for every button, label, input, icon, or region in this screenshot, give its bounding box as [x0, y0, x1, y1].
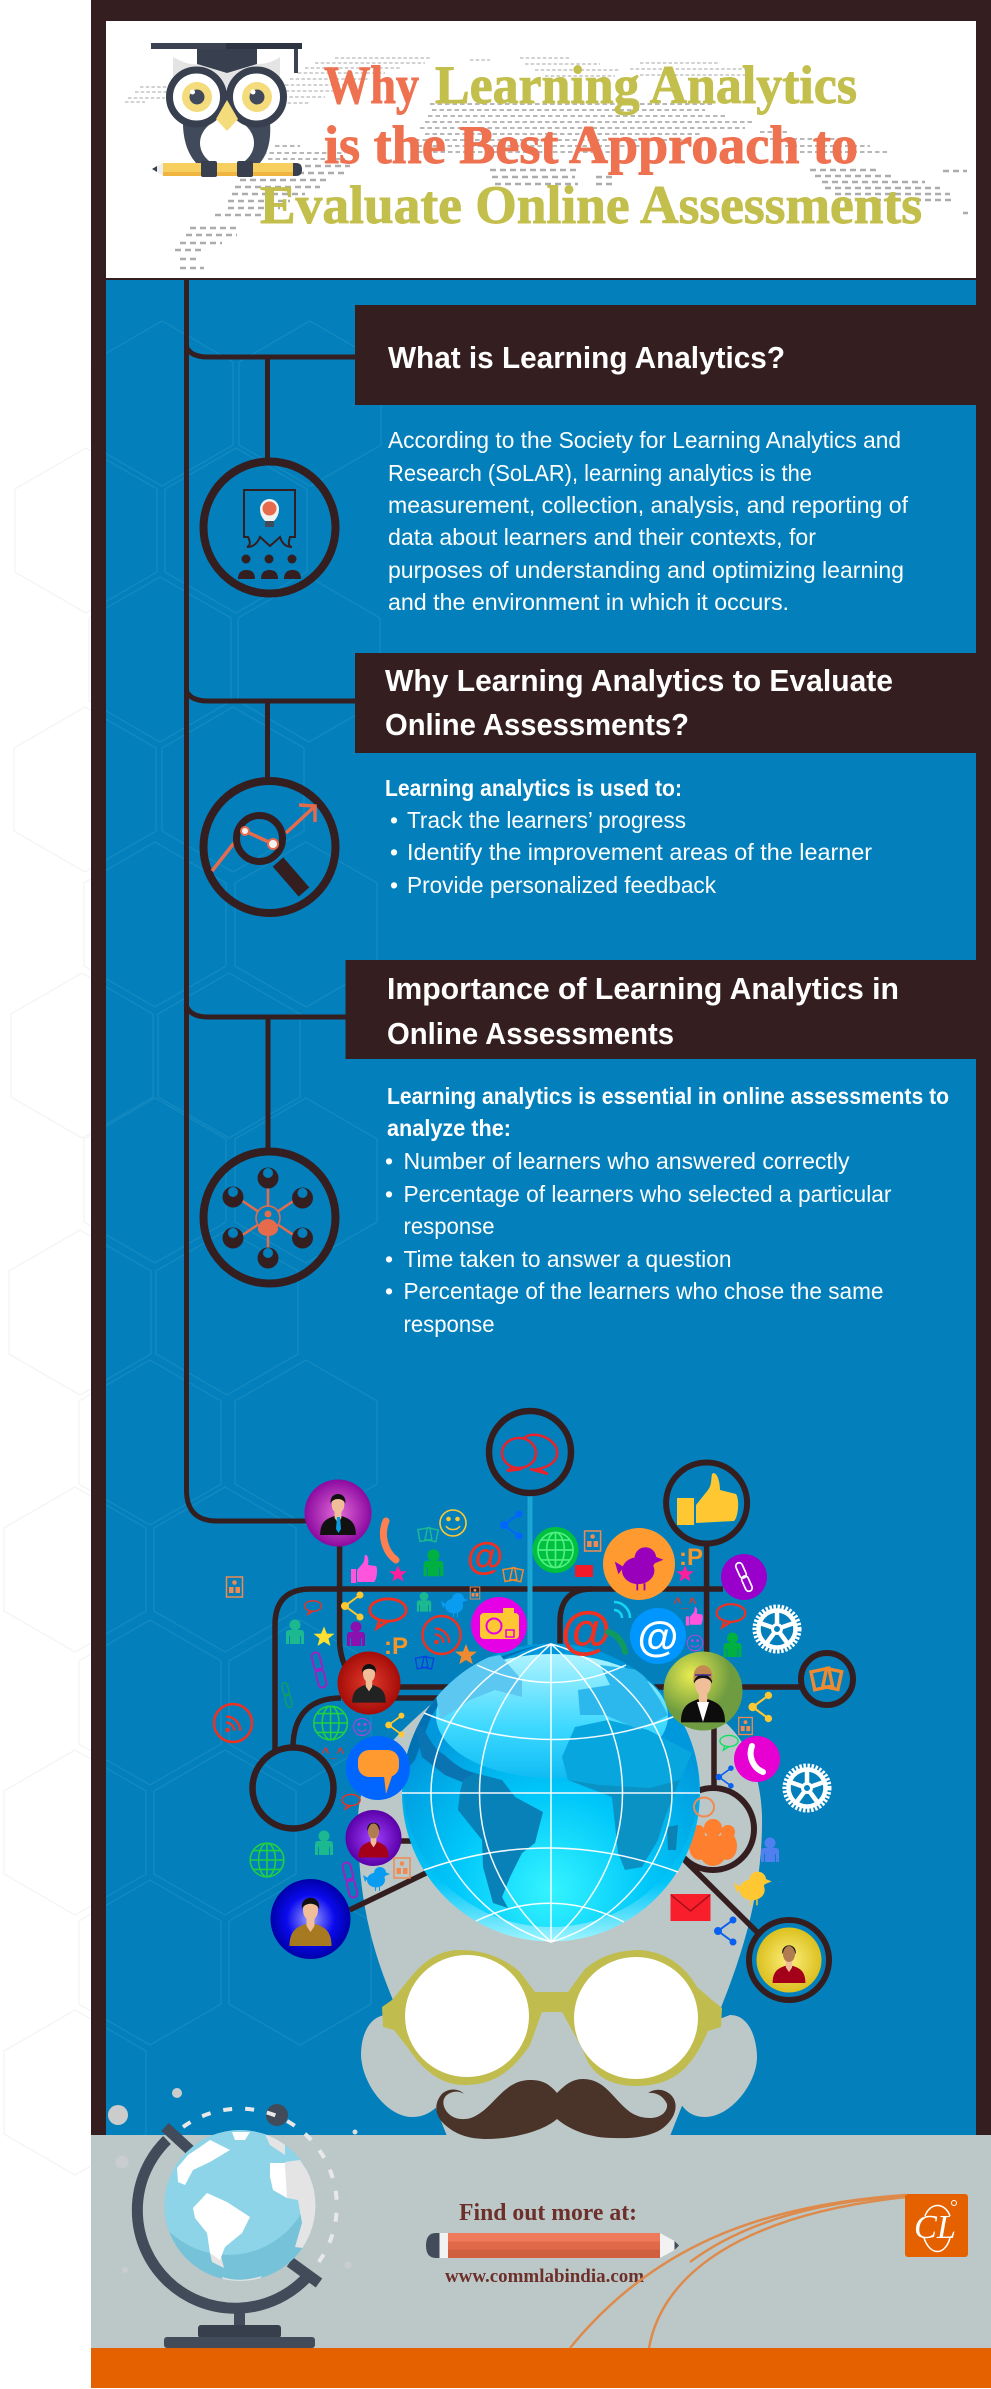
body text: Percentage of learners who selected a particular: [404, 1181, 892, 1207]
circle: thumbs up: [666, 1462, 747, 1544]
connector lines for sections: [186, 278, 356, 1521]
small social icons: @: [466, 1536, 504, 1578]
body text: According to the Society for Learning Analytics and: [388, 427, 901, 453]
head: [358, 1700, 762, 2136]
footer orange strip: [91, 2348, 991, 2388]
circle: photos: [801, 1653, 853, 1705]
illustration: professor head with globe and social icons: [214, 1411, 853, 2139]
logo: CommLab: CL: [914, 2209, 956, 2246]
footer: desk globe: [108, 2085, 358, 2348]
icon: magnifier over trend line: [204, 781, 336, 913]
small social icons: :P: [679, 1544, 703, 1571]
world map dots: [125, 58, 968, 268]
circle: speech bubbles: [489, 1411, 571, 1493]
dashed orbit: [183, 2109, 337, 2263]
title: is the Best Approach to: [324, 115, 858, 175]
panel: importance of learning analytics: [204, 960, 976, 1337]
body text: •: [385, 1246, 393, 1272]
icon: bulb presentation to audience: [204, 462, 336, 594]
body text: and the environment in which it occurs.: [388, 589, 789, 615]
body text: data about learners and their contexts, for: [388, 524, 816, 550]
body text: [388, 427, 909, 615]
small social icons: ^_^: [322, 1745, 345, 1760]
body text: [385, 1083, 949, 1337]
body text: Research (SoLAR), learning analytics is the: [388, 460, 812, 486]
body text: Identify the improvement areas of the learner: [407, 839, 872, 865]
heading banner: [355, 305, 976, 405]
stand: [137, 2127, 319, 2348]
avatar: man red: [338, 1652, 400, 1714]
decorative dots: [108, 2088, 358, 2273]
small social icons: ^_^: [674, 1595, 697, 1610]
avatar: man yellow: [749, 1920, 829, 2000]
avatar: man violet: [346, 1810, 402, 1866]
heading banner: Online Assessments?: [385, 707, 689, 742]
title: Why: [324, 55, 419, 115]
icon: pencil: [426, 2233, 679, 2258]
heading banner: Why Learning Analytics to Evaluate: [385, 663, 893, 698]
icon: camera circle: [471, 1597, 527, 1653]
small social icons: [214, 1510, 779, 1944]
find out more: www.commlabindia.com: [445, 2266, 644, 2287]
body text: analyze the:: [387, 1115, 511, 1141]
body text: Percentage of the learners who chose the same: [404, 1278, 884, 1304]
globe sphere: [164, 2130, 316, 2281]
icon: green globe circle: [532, 1527, 578, 1573]
icon: at circle: [630, 1608, 686, 1664]
body text: Learning analytics is used to:: [385, 775, 682, 801]
icon: network of learners: [204, 1152, 336, 1284]
blue content panel: [106, 280, 976, 2135]
body text: •: [390, 839, 398, 865]
icon: at circle: @: [638, 1613, 678, 1660]
small social icons: :P: [384, 1633, 408, 1660]
page background with faint hexagons: [4, 362, 91, 2176]
teal connector: [528, 1496, 532, 1646]
heading banner: What is Learning Analytics?: [388, 340, 785, 375]
avatars: [270, 1480, 829, 2000]
globe: [402, 1643, 700, 1942]
title: [260, 55, 922, 235]
title: Evaluate Online Assessments: [260, 175, 922, 235]
body text: Track the learners’ progress: [407, 807, 686, 833]
panel: why learning analytics: [204, 653, 976, 913]
icon: chat circle: [346, 1736, 410, 1800]
body text: measurement, collection, analysis, and reporting of: [388, 492, 909, 518]
network lines: [275, 1546, 800, 1932]
heading banner: [355, 653, 976, 753]
panel: what is learning analytics: [204, 305, 976, 615]
icon: big red at: @: [561, 1602, 611, 1660]
glasses: [382, 1950, 722, 2086]
moustache: [436, 2079, 676, 2139]
icon: chain circle: [721, 1554, 767, 1600]
heading banner: [346, 960, 976, 1059]
header panel: [106, 21, 976, 278]
body text: •: [390, 872, 398, 898]
find out more: Find out more at:: [459, 2200, 637, 2226]
body text: Learning analytics is essential in online assessments to: [387, 1083, 949, 1109]
orange people circle: [672, 1788, 754, 1870]
body text: Provide personalized feedback: [407, 872, 716, 898]
icon: gears: [755, 1607, 829, 1810]
footer gray band: [91, 2135, 991, 2348]
avatar: man in suit purple: [304, 1480, 372, 1546]
body text: Number of learners who answered correctly: [404, 1148, 850, 1174]
title: Learning Analytics: [435, 55, 857, 115]
body text: •: [385, 1148, 393, 1174]
body text: •: [385, 1181, 393, 1207]
icon: twitter bird circle: [603, 1528, 675, 1600]
body text: •: [390, 807, 398, 833]
curved orange lines: [570, 2195, 906, 2348]
avatar: man blue: [270, 1879, 350, 1959]
logo: CommLab: [905, 2194, 968, 2257]
find out more: [426, 2200, 679, 2287]
circle: empty node: [252, 1748, 334, 1828]
heading banner: Importance of Learning Analytics in: [387, 971, 899, 1006]
body text: purposes of understanding and optimizing learning: [388, 557, 904, 583]
icon: owl with graduation cap on pencil: [151, 43, 302, 177]
heading banner: Online Assessments: [387, 1016, 674, 1051]
body text: response: [404, 1213, 494, 1239]
body text: •: [385, 1278, 393, 1304]
body text: response: [404, 1311, 494, 1337]
body text: Time taken to answer a question: [404, 1246, 732, 1272]
icon: phone circle: [734, 1736, 780, 1782]
body text: [385, 775, 872, 898]
avatar: woman green: [664, 1652, 742, 1730]
